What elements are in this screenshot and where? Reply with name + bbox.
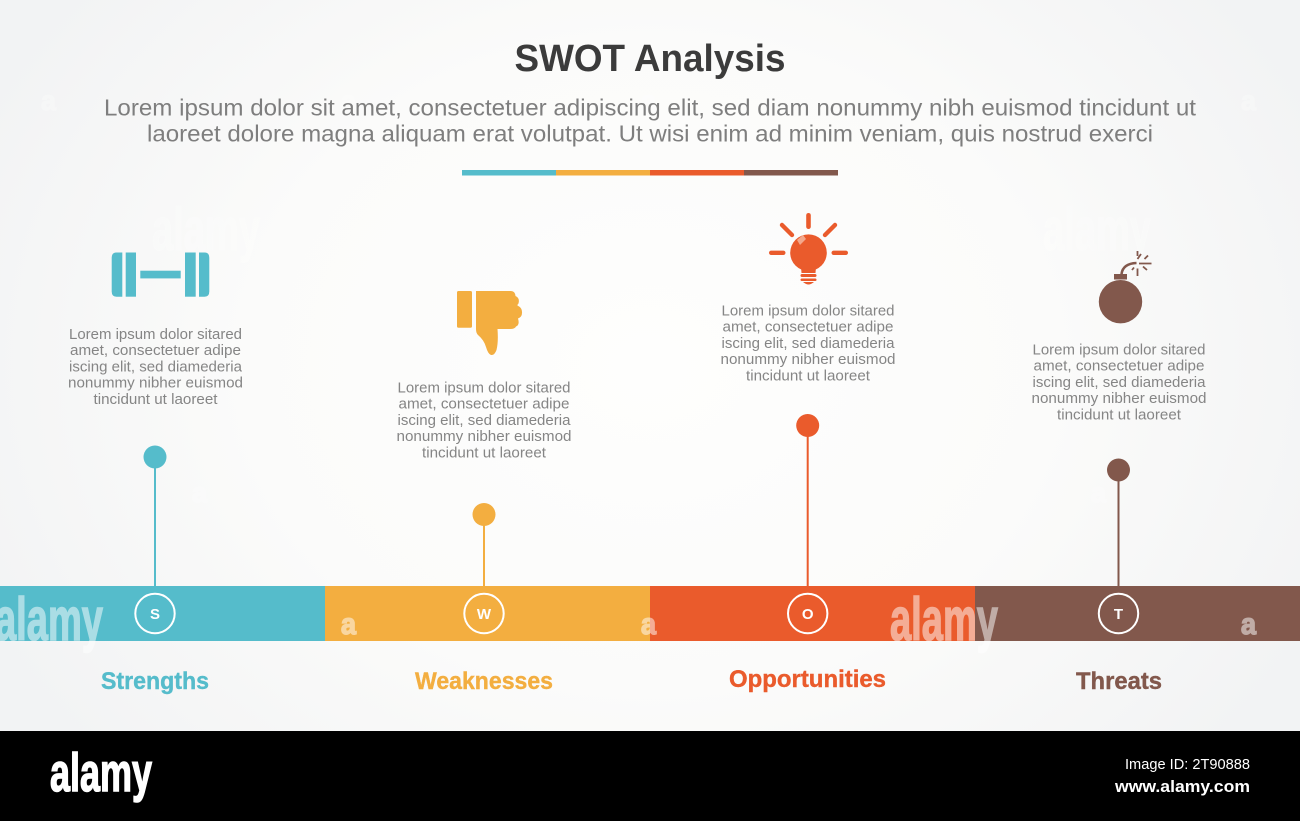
label: strengths: Strengths	[101, 668, 209, 695]
badge: S	[135, 594, 175, 633]
faint background watermarks	[41, 85, 1256, 508]
label: threats: Threats	[1076, 668, 1162, 695]
faint background watermarks: alamy	[152, 196, 260, 263]
faint background watermarks: a	[341, 85, 356, 116]
text: weaknesses: tincidunt ut laoreet	[422, 445, 546, 461]
icon: light bulb	[769, 213, 848, 284]
label: opportunities: Opportunities	[729, 666, 886, 693]
faint background watermarks: a	[641, 85, 656, 116]
faint background watermarks: a	[41, 85, 56, 116]
label: weaknesses: Weaknesses	[415, 668, 553, 695]
text: strengths: iscing elit, sed diamederia	[69, 359, 243, 375]
icon: bomb	[1099, 251, 1152, 323]
text: opportunities: nonummy nibher euismod	[720, 352, 896, 368]
faint background watermarks: alamy	[1043, 196, 1151, 263]
footer band	[0, 731, 1300, 821]
text: opportunities: tincidunt ut laoreet	[746, 368, 870, 384]
badge: W: W	[477, 606, 492, 623]
text: weaknesses: amet, consectetuer adipe	[398, 397, 570, 413]
text: strengths: amet, consectetuer adipe	[70, 343, 241, 359]
bar watermarks: a	[1241, 608, 1256, 641]
text: threats: Lorem ipsum dolor sitared	[1032, 342, 1206, 358]
badge: T: T	[1114, 606, 1123, 623]
icon: thumbs down	[457, 291, 522, 355]
text: threats: iscing elit, sed diamederia	[1032, 375, 1206, 391]
text: weaknesses	[396, 380, 572, 461]
text: opportunities: iscing elit, sed diamederia	[722, 336, 895, 352]
text: threats: amet, consectetuer adipe	[1034, 359, 1204, 375]
marker: weaknesses	[472, 503, 496, 587]
bar watermarks: alamy	[890, 586, 998, 653]
badge: W	[464, 594, 504, 633]
bar watermarks: a	[641, 608, 656, 641]
colored divider	[462, 170, 838, 176]
text: opportunities	[720, 304, 896, 384]
footer logo: alamy	[50, 743, 152, 803]
text: strengths	[68, 327, 243, 408]
marker: threats	[1107, 458, 1130, 587]
icon: dumbbell	[112, 252, 209, 297]
title: SWOT Analysis	[514, 38, 786, 80]
marker: strengths	[144, 446, 166, 587]
text: weaknesses: nonummy nibher euismod	[396, 429, 572, 445]
footer image id: Image ID: 2T90888	[1125, 756, 1250, 773]
text: opportunities: Lorem ipsum dolor sitared	[722, 304, 894, 320]
bar watermarks	[0, 586, 1256, 653]
text: threats	[1032, 342, 1206, 423]
faint background watermarks: a	[1091, 477, 1106, 508]
intro text: laoreet dolore magna aliquam erat volutpat. Ut wisi enim ad minim veniam, quis nostrud exerci	[147, 120, 1153, 146]
text: strengths: Lorem ipsum dolor sitared	[69, 327, 242, 343]
intro text: Lorem ipsum dolor sit amet, consectetuer adipiscing elit, sed diam nonummy nibh euismod tincidunt ut	[104, 94, 1196, 120]
text: threats: tincidunt ut laoreet	[1057, 407, 1181, 423]
faint background watermarks: a	[941, 85, 956, 116]
bar watermarks: alamy	[0, 586, 103, 653]
text: strengths: tincidunt ut laoreet	[94, 392, 218, 408]
marker: opportunities	[796, 414, 819, 587]
timeline bar	[0, 586, 1300, 641]
badge: S: S	[150, 606, 160, 623]
badge: O	[788, 594, 827, 633]
badge: O: O	[802, 606, 814, 623]
text: weaknesses: iscing elit, sed diamederia	[398, 413, 571, 429]
text: opportunities: amet, consectetuer adipe	[722, 320, 894, 336]
faint background watermarks: a	[1241, 85, 1256, 116]
footer url: www.alamy.com	[1114, 777, 1250, 796]
badge: T	[1099, 594, 1138, 633]
intro text	[104, 94, 1196, 146]
text: threats: nonummy nibher euismod	[1032, 391, 1206, 407]
text: weaknesses: Lorem ipsum dolor sitared	[398, 380, 570, 396]
text: strengths: nonummy nibher euismod	[68, 376, 243, 392]
bar watermarks: a	[341, 608, 356, 641]
faint background watermarks: a	[192, 477, 207, 508]
